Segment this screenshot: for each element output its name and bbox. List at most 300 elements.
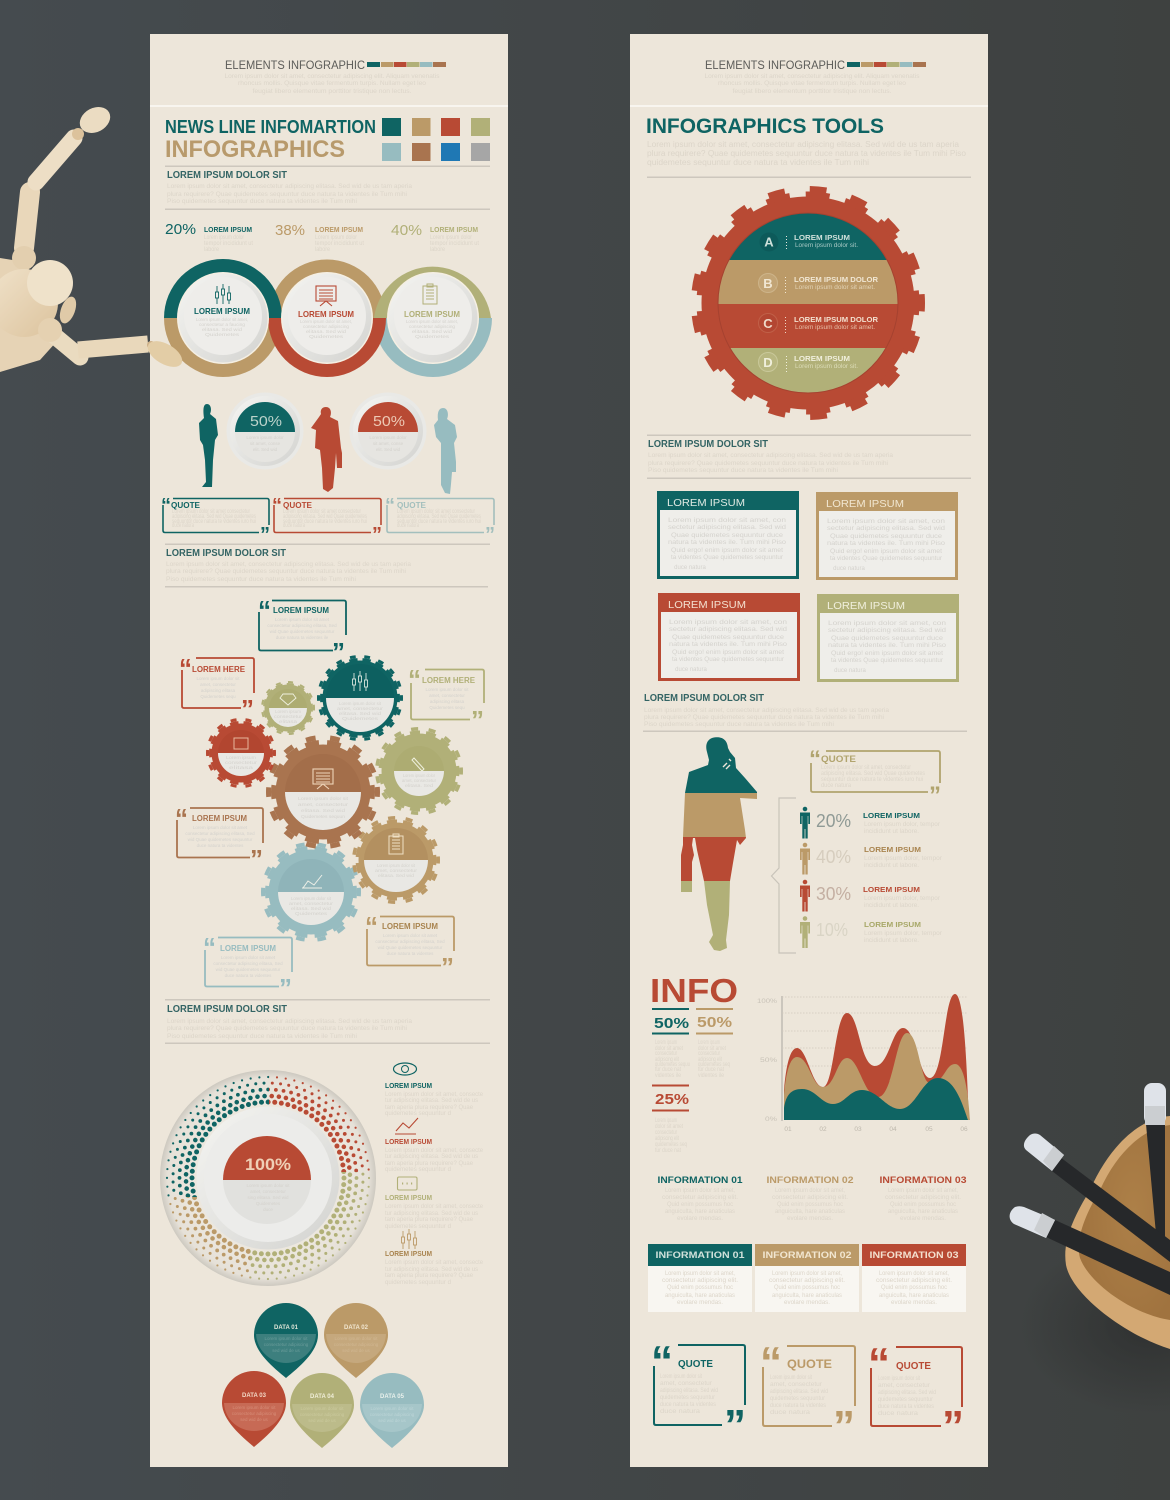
card: red: Quae quidemetes sequuntur duce xyxy=(672,635,785,641)
stat: 20%: LOREM IPSUM xyxy=(863,811,920,820)
gear: brown central: Lorem ipsum dolor sit xyxy=(298,796,349,801)
section heading 2: Piso quidemetes sequuntur duce natura ta videntes ile Tum mihi xyxy=(166,577,356,583)
big quote tan: adipiscing elitasa. Sed wid xyxy=(770,1389,828,1395)
pin: data 02: consectetur adipiscing xyxy=(334,1342,379,1347)
gear: red xyxy=(208,720,274,786)
info block: Lorem ipsum xyxy=(655,1118,677,1124)
card: teal xyxy=(657,491,799,578)
stat: 38%: 38% xyxy=(275,222,305,239)
info block xyxy=(650,972,738,1154)
information column 01: anguiculta, hare anaticulas xyxy=(665,1209,735,1215)
stat: 38%: tempor incididunt ut xyxy=(315,241,364,247)
area chart: 02 xyxy=(819,1126,827,1133)
ring 2: Quidemetes xyxy=(309,334,344,339)
big quote teal: duce natura ta videntes xyxy=(660,1402,716,1408)
table card 02: evolare mendas. xyxy=(784,1300,830,1306)
series: teal xyxy=(784,1078,968,1120)
information column 03: Quid enim possumus hoc xyxy=(890,1202,956,1208)
table card 03: Quid enim possumus hoc xyxy=(881,1285,947,1291)
list item: chart: Lorem ipsum dolor sit amet, consecte xyxy=(385,1148,484,1154)
pin: data 01: Lorem ipsum dolor sit xyxy=(264,1336,308,1341)
title: news line information: INFOGRAPHICS xyxy=(165,136,345,163)
list item: chat: tur adipiscing elitasa. Sed wid de us xyxy=(385,1211,478,1217)
quote box red: duce natura xyxy=(283,523,305,529)
quote: blue lorem ipsum xyxy=(203,932,292,1003)
header: elements infographic xyxy=(224,58,446,95)
information column 03 xyxy=(880,1175,966,1222)
card: olive: Lorem ipsum dolor sit amet, con xyxy=(828,621,946,627)
big quote red xyxy=(868,1339,964,1451)
ring 2: consectetur adipiscing xyxy=(303,324,350,329)
gear: teal: elitasa. Sed wid xyxy=(339,711,382,716)
information column 03: anguiculta, hare anaticulas xyxy=(888,1209,958,1215)
card: red: Quid ergo! enim ipsum dolor sit amet xyxy=(672,650,784,656)
pin: data 01: DATA 01 xyxy=(274,1325,299,1331)
quote box teal: adipiscing elitasa. Sed wid Quae quidemetes xyxy=(172,514,256,520)
gear: olive small: consectetur xyxy=(274,714,303,719)
list item: chat: Lorem ipsum dolor sit amet, consecte xyxy=(385,1204,484,1210)
quote: olive lorem here: LOREM HERE xyxy=(422,676,476,685)
big quote red: quidemetes sequuntur xyxy=(878,1397,933,1403)
quote box blue: ” xyxy=(485,524,495,546)
stat: 20% xyxy=(800,807,940,838)
pencil vertical xyxy=(1144,1083,1166,1245)
big quote teal: amet, consectetur xyxy=(660,1381,712,1387)
band A: A xyxy=(764,234,774,250)
card: olive: sectetur adipiscing elitasa. Sed wid xyxy=(828,628,946,634)
table card 01: evolare mendas. xyxy=(677,1300,723,1306)
stat: 30%: incididunt ut labore. xyxy=(864,903,919,909)
title: infographics tools: Lorem ipsum dolor sit amet, consectetur adipiscing elitasa. Sed wid de us tam aperia xyxy=(647,140,960,149)
pin: data 05: sed wid de us xyxy=(378,1418,407,1423)
silhouette: blue person xyxy=(434,408,457,494)
quote: brown lorem ipsum: “ xyxy=(175,803,188,833)
quote: red lorem here xyxy=(179,653,254,724)
quote box olive: Lorem ipsum dolor sit amet, consectetur xyxy=(821,765,911,771)
band A: Lorem ipsum dolor sit. xyxy=(795,243,858,249)
information column 02: consectetur adipiscing elit. xyxy=(772,1195,848,1201)
band C xyxy=(758,314,879,333)
big quote teal: QUOTE xyxy=(678,1359,713,1370)
area chart: 0% xyxy=(765,1116,777,1123)
information column 03: consectetur adipiscing elit. xyxy=(885,1195,961,1201)
card: olive: LOREM IPSUM xyxy=(827,600,905,612)
big quote teal: Lorem ipsum dolor sit xyxy=(660,1374,702,1380)
ring 1 xyxy=(177,272,269,364)
band A xyxy=(760,232,858,252)
card: teal: natura ta videntes ile. Tum mihi Piso xyxy=(668,540,787,546)
stat: 38%: Lorem ipsum dolor xyxy=(315,235,357,241)
info block: videntes ile xyxy=(698,1073,725,1079)
gear: tan: Lorem ipsum dolor sit xyxy=(377,863,416,868)
circle: 50% red: elit. Sed wid xyxy=(376,447,401,452)
section heading 1: Lorem ipsum dolor sit amet, consectetur adipiscing elitasa. Sed wid de us tam aperia xyxy=(167,184,413,190)
area chart xyxy=(757,994,970,1133)
band C: LOREM IPSUM DOLOR xyxy=(794,315,879,324)
quote: red lorem here: LOREM HERE xyxy=(192,665,246,674)
table card 02: anguiculta, hare anaticulas xyxy=(772,1293,842,1299)
quote: teal top: Lorem ipsum dolor sit amet xyxy=(275,617,330,622)
icon: presentation board xyxy=(313,769,333,789)
information column 01 xyxy=(658,1175,742,1222)
quote box red: QUOTE xyxy=(283,501,313,510)
dial: 100% dotted ring: Lorem ipsum dolor sit xyxy=(246,1183,290,1188)
stat: 40%: LOREM IPSUM xyxy=(864,845,921,854)
table card 03: INFORMATION 03 xyxy=(870,1250,958,1260)
quote: tan lorem ipsum: “ xyxy=(365,911,378,941)
big quote teal: adipiscing elitasa. Sed wid xyxy=(660,1388,718,1394)
table card 02 xyxy=(755,1244,859,1312)
pin: data 03: Lorem ipsum dolor sit xyxy=(232,1405,276,1410)
list item: eye: LOREM IPSUM xyxy=(385,1083,432,1090)
stat: 10%: 10% xyxy=(816,920,848,940)
stat: 40% xyxy=(800,843,942,874)
band D: D xyxy=(763,355,773,370)
stat: 30%: LOREM IPSUM xyxy=(863,885,920,894)
header: elements infographic: feugiat libero elementum porttitor tristique non lectus. xyxy=(732,89,892,95)
quote: brown lorem ipsum: LOREM IPSUM xyxy=(192,814,247,823)
card: olive: ta videntes Quae quidemetes sequuntur xyxy=(831,658,943,664)
area chart: 04 xyxy=(889,1126,897,1133)
panel: right sheet xyxy=(630,34,988,1467)
quote: teal top: duce natura ta videntes ile xyxy=(276,635,329,640)
table card 03: Lorem ipsum dolor sit amet, xyxy=(879,1271,949,1277)
info block: 50% xyxy=(697,1014,732,1031)
gear: red: elitasa xyxy=(229,765,254,770)
circle: 50% teal xyxy=(226,392,304,470)
card: tan: sectetur adipiscing elitasa. Sed wid xyxy=(827,526,945,532)
card: olive: Quae quidemetes sequuntur duce xyxy=(831,636,944,642)
info block: adipiscing elit xyxy=(698,1057,722,1063)
area chart: 50% xyxy=(760,1057,777,1064)
header: elements infographic xyxy=(704,58,926,95)
section heading 5: Piso quidemetes sequuntur duce natura ta videntes ile Tum mihi xyxy=(644,722,834,728)
quote: tan lorem ipsum: LOREM IPSUM xyxy=(382,922,438,931)
quote box red: ” xyxy=(372,524,382,546)
stat: 40%: LOREM IPSUM xyxy=(430,227,478,234)
area chart: 03 xyxy=(854,1126,862,1133)
list item: chat: LOREM IPSUM xyxy=(385,1195,432,1202)
stat: 38%: labore xyxy=(315,247,331,253)
gear: brown central: Quidemetes sequun xyxy=(301,814,346,819)
stat: 40%: tempor incididunt ut xyxy=(430,241,479,247)
section heading 1 xyxy=(167,170,413,205)
header: elements infographic: ELEMENTS INFOGRAPHIC xyxy=(225,58,365,72)
list item: chart xyxy=(385,1118,484,1173)
information column 01: INFORMATION 01 xyxy=(658,1175,742,1185)
stat: 20%: Lorem ipsum dolor, tempor xyxy=(864,822,940,828)
quote box olive: duce natura xyxy=(821,783,852,789)
pin: data 02 xyxy=(324,1303,388,1378)
card: olive: Quid ergo! enim ipsum dolor sit amet xyxy=(831,651,943,657)
circle: 50% teal: sit amet, conse xyxy=(250,441,281,446)
card: teal: Quae quidemetes sequuntur duce xyxy=(671,533,784,539)
dial: 100% dotted ring: 100% xyxy=(245,1155,291,1174)
big quote tan: “ xyxy=(760,1338,782,1387)
area chart: 100% xyxy=(757,998,777,1005)
big quote teal: “ xyxy=(651,1337,673,1386)
band C: C xyxy=(763,316,773,331)
quote: brown lorem ipsum: ” xyxy=(250,844,263,874)
ring 2: LOREM IPSUM xyxy=(298,309,354,319)
card: tan: natura ta videntes ile. Tum mihi Piso xyxy=(827,541,946,547)
card: tan: Quae quidemetes sequuntur duce xyxy=(830,534,943,540)
quote: blue lorem ipsum: Lorem ipsum dolor sit amet xyxy=(221,955,276,960)
info block: Lorem ipsum xyxy=(655,1040,677,1046)
section heading 1: LOREM IPSUM DOLOR SIT xyxy=(167,170,287,181)
quote: olive lorem here: amet, consectetur xyxy=(429,693,465,698)
quote: blue lorem ipsum: duce natura ta videntes xyxy=(225,973,272,978)
section heading 5: Lorem ipsum dolor sit amet, consectetur adipiscing elitasa. Sed wid de us tam aperia xyxy=(644,708,890,714)
list item: sliders: quidemetes sequuntur d xyxy=(385,1280,451,1286)
band B: B xyxy=(763,276,773,291)
quote box olive: ” xyxy=(929,782,941,809)
stat: 40%: Lorem ipsum dolor xyxy=(430,235,472,241)
area chart: 06 xyxy=(960,1126,968,1133)
card: red: sectetur adipiscing elitasa. Sed wid xyxy=(669,627,787,633)
dots: tan quadrant xyxy=(169,1197,250,1278)
list item: chart: tur adipiscing elitasa. Sed wid de us xyxy=(385,1154,478,1160)
quote: tan lorem ipsum: ” xyxy=(441,952,454,982)
pin: data 05: DATA 05 xyxy=(380,1394,405,1400)
stat: 30% xyxy=(800,880,940,912)
silhouette: man in colour bands xyxy=(681,737,757,951)
icon: clipboard xyxy=(389,834,403,854)
pin: data 04: Lorem ipsum dolor sit xyxy=(300,1406,344,1411)
info block: consectetur xyxy=(655,1051,677,1057)
quote: teal top: consectetur adipiscing elitasa, Sed xyxy=(267,623,337,628)
list item: eye xyxy=(385,1063,484,1117)
dots: olive quadrant xyxy=(250,1172,370,1280)
info block: videntes ile xyxy=(655,1073,682,1079)
gear: teal: Quidemetes xyxy=(342,716,379,721)
card: tan: LOREM IPSUM xyxy=(826,498,904,510)
quote box blue: sequuntur duce natura te videntes iuro hui xyxy=(397,519,481,525)
pin: data 01: sed wid de us xyxy=(272,1348,301,1353)
gear: olive large xyxy=(377,729,461,813)
stat: 20%: 20% xyxy=(165,221,196,238)
card: tan: ta videntes Quae quidemetes sequuntur xyxy=(830,556,942,562)
section heading 4: Lorem ipsum dolor sit amet, consectetur adipiscing elitasa. Sed wid de us tam aperia xyxy=(648,453,894,459)
stat: 40%: incididunt ut labore. xyxy=(864,863,919,869)
stat: 38%: LOREM IPSUM xyxy=(315,227,363,234)
card: red: duce natura xyxy=(675,667,708,673)
list item: sliders: LOREM IPSUM xyxy=(385,1251,432,1258)
icon: sliders xyxy=(216,284,230,304)
wooden mannequin xyxy=(0,102,186,372)
icon: presentation board xyxy=(316,286,336,306)
stat: 20% xyxy=(165,221,253,253)
silhouette: teal person xyxy=(199,404,218,487)
quote box red: “ xyxy=(272,495,282,517)
section heading 5: LOREM IPSUM DOLOR SIT xyxy=(644,693,764,704)
pin: data 03 xyxy=(222,1371,286,1447)
quote box red: adipiscing elitasa. Sed wid Quae quidemetes xyxy=(283,514,367,520)
quote: brown lorem ipsum: wid Quae quidemetes sequuntur xyxy=(188,837,253,842)
table card 01: Quid enim possumus hoc xyxy=(667,1285,733,1291)
circle: 50% red: Lorem ipsum dolor xyxy=(369,435,407,440)
section heading 4: Piso quidemetes sequuntur duce natura ta videntes ile Tum mihi xyxy=(648,468,838,474)
pin: data 03: DATA 03 xyxy=(242,1393,267,1399)
info block: Lorem ipsum xyxy=(698,1040,720,1046)
band A: LOREM IPSUM xyxy=(794,233,850,242)
quote box teal xyxy=(161,495,270,546)
section heading 2 xyxy=(166,548,412,583)
ring 2: elitasa. Sed wid xyxy=(306,329,347,334)
big quote tan: duce natura ta videntes xyxy=(770,1403,826,1409)
dial: 100% dotted ring: duce xyxy=(263,1207,273,1212)
gear: olive small: Lorem ipsum xyxy=(275,709,301,714)
information column 02: INFORMATION 02 xyxy=(766,1175,854,1185)
pin: data 03: consectetur adipiscing xyxy=(232,1411,277,1416)
info block: quidemetes seq xyxy=(698,1062,730,1068)
header: elements infographic: feugiat libero elementum porttitor tristique non lectus. xyxy=(252,89,412,95)
card: teal: Lorem ipsum dolor sit amet, con xyxy=(668,518,786,524)
card: red xyxy=(658,593,800,680)
table card 03 xyxy=(862,1244,966,1312)
gear: olive large: Lorem ipsum dolor xyxy=(403,773,435,778)
table card 02: Lorem ipsum dolor sit amet, xyxy=(772,1271,842,1277)
circle: 50% teal: elit. Sed wid xyxy=(253,447,278,452)
quote: olive lorem here: Lorem ipsum dolor sit xyxy=(425,687,469,692)
card: olive: natura ta videntes ile. Tum mihi Piso xyxy=(828,643,947,649)
info block: quidemetes seq xyxy=(655,1142,687,1148)
ring 1: Lorem ipsum dolor sit amet, xyxy=(196,317,248,322)
title: infographics tools: plura requirere? Quae quidemetes sequuntur duce natura ta videntes ile Tum mihi Piso xyxy=(647,149,967,158)
quote box blue: “ xyxy=(385,495,395,517)
title: infographics tools xyxy=(646,115,967,167)
gear: blue: amet, consectetur xyxy=(289,901,334,906)
pin: data 02: sed wid de us xyxy=(342,1348,371,1353)
stat: 10%: Lorem ipsum dolor, tempor xyxy=(864,931,942,937)
section heading 4: plura requirere? Quae quidemetes sequuntur duce natura ta videntes ile Tum mihi xyxy=(648,461,888,467)
gear: brown central: elitasa. Sed wid xyxy=(301,808,346,813)
ring 1: consectetur a faucing xyxy=(199,322,246,327)
section heading 1: plura requirere? Quae quidemetes sequuntur duce natura ta videntes ile Tum mihi xyxy=(167,192,407,198)
big quote red: adipiscing elitasa. Sed wid xyxy=(878,1390,936,1396)
info block: 50% xyxy=(654,1015,689,1032)
list item: eye: tam aperia plura requirere? Quae xyxy=(385,1105,474,1111)
band D: LOREM IPSUM xyxy=(794,354,850,363)
card: olive: duce natura xyxy=(834,668,867,674)
info block: dolor sit amet xyxy=(655,1124,683,1130)
quote: tan lorem ipsum: consectetur adipiscing elitasa, Sed xyxy=(375,939,445,944)
stat: 20%: LOREM IPSUM xyxy=(204,227,252,234)
gear: blue: Lorem ipsum dolor sit xyxy=(291,896,332,901)
circle: 50% teal: 50% xyxy=(250,413,282,430)
big quote red: “ xyxy=(868,1339,890,1388)
quote: red lorem here: amet, consectetur xyxy=(200,682,236,687)
band D: Lorem ipsum dolor sit. xyxy=(795,364,858,370)
header: elements infographic: rhoncus mollis. Quisque vitae fermentum turpis. Nullam eget leo xyxy=(718,81,907,87)
quote box red xyxy=(272,495,382,546)
table card 01: anguiculta, hare anaticulas xyxy=(665,1293,735,1299)
band C: Lorem ipsum dolor sit amet. xyxy=(795,325,875,331)
big quote red: duce natura ta videntes xyxy=(878,1404,934,1410)
ring 1: elitasa. Sed wid xyxy=(202,327,243,332)
section heading 3: plura requirere? Quae quidemetes sequuntur duce natura ta videntes ile Tum mihi xyxy=(167,1026,407,1032)
quote box teal: “ xyxy=(161,495,171,517)
dots: teal quadrant xyxy=(166,1076,269,1197)
title: news line information: NEWS LINE INFOMARTION xyxy=(165,117,376,137)
big quote tan: QUOTE xyxy=(787,1357,832,1371)
big quote teal xyxy=(651,1337,746,1450)
circle: 50% teal: Lorem ipsum dolor xyxy=(246,435,284,440)
gear: tan xyxy=(354,818,438,902)
quote: red lorem here: ” xyxy=(241,694,254,724)
quote box red: sequuntur duce natura te videntes iuro hui xyxy=(283,519,367,525)
quote box blue: adipiscing elitasa. Sed wid Quae quidemetes xyxy=(397,514,481,520)
band B xyxy=(758,274,879,293)
quote box olive xyxy=(809,746,941,809)
info block: adipiscing elit xyxy=(655,1136,679,1142)
card: tan: Lorem ipsum dolor sit amet, con xyxy=(827,519,945,525)
pin: data 01 xyxy=(254,1303,318,1378)
big quote tan: duce natura xyxy=(770,1410,811,1416)
series: tan xyxy=(784,1033,970,1120)
information column 01: consectetur adipiscing elit. xyxy=(662,1195,738,1201)
title: news line information xyxy=(165,117,376,163)
panel: left sheet xyxy=(150,34,508,1467)
gear: brown central: amet, consectetur xyxy=(298,802,349,807)
quote box blue xyxy=(385,495,495,546)
circle: 50% red: sit amet, conse xyxy=(373,441,404,446)
list item: chat xyxy=(385,1177,484,1230)
card: tan xyxy=(816,492,958,578)
gear: teal: Lorem ipsum dolor sit xyxy=(339,701,382,706)
gear: teal: amet, consectetur xyxy=(337,706,384,711)
section heading 4 xyxy=(648,439,894,474)
list item: chart: quidemetes sequuntur d xyxy=(385,1167,451,1173)
series: red xyxy=(784,994,969,1120)
ring 2 xyxy=(281,272,373,364)
pin: data 05 xyxy=(360,1373,424,1448)
quote box blue: Lorem ipsum dolor sit amet consectetur xyxy=(397,509,475,515)
table card 03: anguiculta, hare anaticulas xyxy=(879,1293,949,1299)
section heading 2: LOREM IPSUM DOLOR SIT xyxy=(166,548,286,559)
info block: INFO xyxy=(650,972,738,1009)
quote: olive lorem here: Quidemetes sequ xyxy=(429,705,465,710)
section heading 5 xyxy=(644,693,890,728)
title: infographics tools: quidemetes sequuntur duce natura ta videntes ile Tum mihi xyxy=(647,158,869,167)
big quote tan: amet, consectetur xyxy=(770,1382,822,1388)
list item: sliders xyxy=(385,1229,484,1286)
quote: blue lorem ipsum: “ xyxy=(203,932,216,962)
pin: data 04: DATA 04 xyxy=(310,1394,335,1400)
section heading 2: Lorem ipsum dolor sit amet, consectetur adipiscing elitasa. Sed wid de us tam aperia xyxy=(166,562,412,568)
list item: eye: quidemetes sequuntur d xyxy=(385,1111,451,1117)
stat: 40%: 40% xyxy=(816,847,851,867)
quote: tan lorem ipsum xyxy=(365,911,454,982)
table card 03: evolare mendas. xyxy=(891,1300,937,1306)
gear: olive large: elitasa. Sed xyxy=(405,783,434,788)
list item: chat: quidemetes sequuntur d xyxy=(385,1224,451,1230)
ring 1: LOREM IPSUM xyxy=(194,306,250,316)
gear: blue xyxy=(263,844,359,940)
pin: data 04 xyxy=(290,1373,354,1448)
table card 01: INFORMATION 01 xyxy=(656,1250,744,1260)
quote: teal top: ” xyxy=(332,637,345,667)
big quote tan: Lorem ipsum dolor sit xyxy=(770,1375,812,1381)
ring 3: elitasa. Sed wid xyxy=(412,329,453,334)
quote: olive lorem here: ” xyxy=(471,705,484,735)
quote box teal: ” xyxy=(260,524,270,546)
card: red: ta videntes Quae quidemetes sequuntur xyxy=(672,657,784,663)
information column 01: Quid enim possumus hoc xyxy=(667,1202,733,1208)
gear: brown central xyxy=(268,738,378,846)
stat: 40% xyxy=(391,222,479,253)
list item: chat: tam aperia plura requirere? Quae xyxy=(385,1217,474,1223)
